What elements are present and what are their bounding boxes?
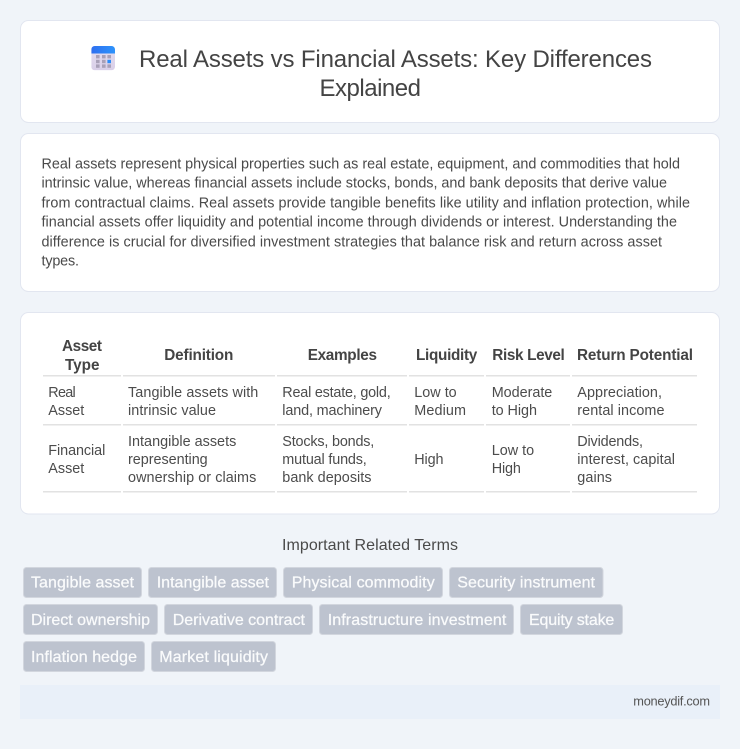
tag: direct ownership <box>24 604 158 634</box>
tag: tangible asset <box>24 568 142 598</box>
panel: introduction <box>20 134 720 292</box>
tag: equity stake: Equity stake <box>529 612 614 629</box>
tag: intangible asset: Intangible asset <box>157 575 270 592</box>
table row: real asset: intrinsic value <box>128 403 216 419</box>
table row: financial asset: High <box>492 461 521 477</box>
text block: introduction paragraph <box>42 156 690 269</box>
tag: security instrument: Security instrument <box>457 575 596 592</box>
table header row: Risk Level <box>492 347 565 364</box>
table row: real asset: Appreciation, <box>577 385 662 401</box>
table row: financial asset: gains <box>577 470 612 486</box>
tag: inflation hedge <box>24 642 144 672</box>
table row: real asset: to High <box>492 403 537 419</box>
tag: intangible asset <box>148 568 276 598</box>
table row: financial asset: Dividends, <box>577 434 643 450</box>
text block: introduction paragraph: types. <box>42 253 79 269</box>
table row: real asset <box>48 385 665 419</box>
table row: financial asset: High <box>414 452 444 468</box>
table row: financial asset: Asset <box>48 461 84 477</box>
title: Explained <box>320 75 421 102</box>
title: Real Assets vs Financial Assets: Key Differences <box>139 46 652 73</box>
table row: real asset: Real estate, gold, <box>282 385 391 401</box>
table header row <box>62 338 693 374</box>
table header row: Liquidity <box>416 347 478 364</box>
icon: calendar <box>91 46 115 70</box>
tag: security instrument <box>450 568 603 598</box>
tag: derivative contract <box>164 604 312 634</box>
table row: real asset: Tangible assets with <box>128 385 258 401</box>
text block: introduction paragraph: Real assets represent physical properties such as real estate, equipment, and commodities that hold <box>42 156 680 172</box>
tag: inflation hedge: Inflation hedge <box>31 649 137 666</box>
tag: tangible asset: Tangible asset <box>31 575 135 592</box>
heading: important related terms: Important Related Terms <box>282 537 458 554</box>
table header row: Definition <box>164 347 233 364</box>
table row: financial asset: representing <box>128 452 208 468</box>
title <box>139 46 652 102</box>
table row: real asset: rental income <box>577 403 664 419</box>
table row: real asset: Asset <box>48 403 84 419</box>
footer band <box>20 685 720 719</box>
table header row: Asset <box>62 338 102 355</box>
table row: real asset: Real <box>48 385 76 401</box>
table row: financial asset: mutual funds, <box>282 452 367 468</box>
table header row: Return Potential <box>577 347 693 364</box>
tag: infrastructure investment: Infrastructure investment <box>328 612 507 629</box>
table row: financial asset: Financial <box>48 443 105 459</box>
table row: real asset: Low to <box>414 385 457 401</box>
table row: financial asset: Intangible assets <box>128 434 236 450</box>
table row: real asset: Moderate <box>492 385 552 401</box>
tag: physical commodity <box>284 568 442 598</box>
tag: equity stake <box>520 604 622 634</box>
table row: financial asset: ownership or claims <box>128 470 256 486</box>
table row: financial asset: Low to <box>492 443 534 459</box>
tag: derivative contract: Derivative contract <box>173 612 306 629</box>
footer source text: moneydif.com <box>633 694 710 709</box>
table row: real asset: land, machinery <box>282 403 383 419</box>
table header row: Type <box>65 357 100 374</box>
text block: introduction paragraph: from contractual claims. Real assets provide tangible benefits like utility and inflation protection, while <box>42 195 690 211</box>
table row: real asset: Medium <box>414 403 466 419</box>
panel: related term tags <box>24 568 622 672</box>
tag: physical commodity: Physical commodity <box>292 575 435 592</box>
tag: infrastructure investment <box>320 604 514 634</box>
tag: market liquidity <box>152 642 276 672</box>
text block: introduction paragraph: financial assets offer liquidity and potential income through dividends or interest. Understanding the <box>42 214 677 230</box>
table header row: Examples <box>308 347 377 364</box>
table row: financial asset <box>48 434 675 486</box>
tag: market liquidity: Market liquidity <box>159 649 268 666</box>
panel: comparison table <box>20 312 720 514</box>
table row: financial asset: bank deposits <box>282 470 372 486</box>
tag: direct ownership: Direct ownership <box>31 612 150 629</box>
text block: introduction paragraph: intrinsic value, whereas financial assets include stocks, bonds, and bank deposits that derive value <box>42 175 667 191</box>
text block: introduction paragraph: difference is crucial for diversified investment strategies that balance risk and return across asset <box>42 234 662 250</box>
table row: financial asset: interest, capital <box>577 452 675 468</box>
panel: header <box>20 20 720 122</box>
table row: financial asset: Stocks, bonds, <box>282 434 374 450</box>
